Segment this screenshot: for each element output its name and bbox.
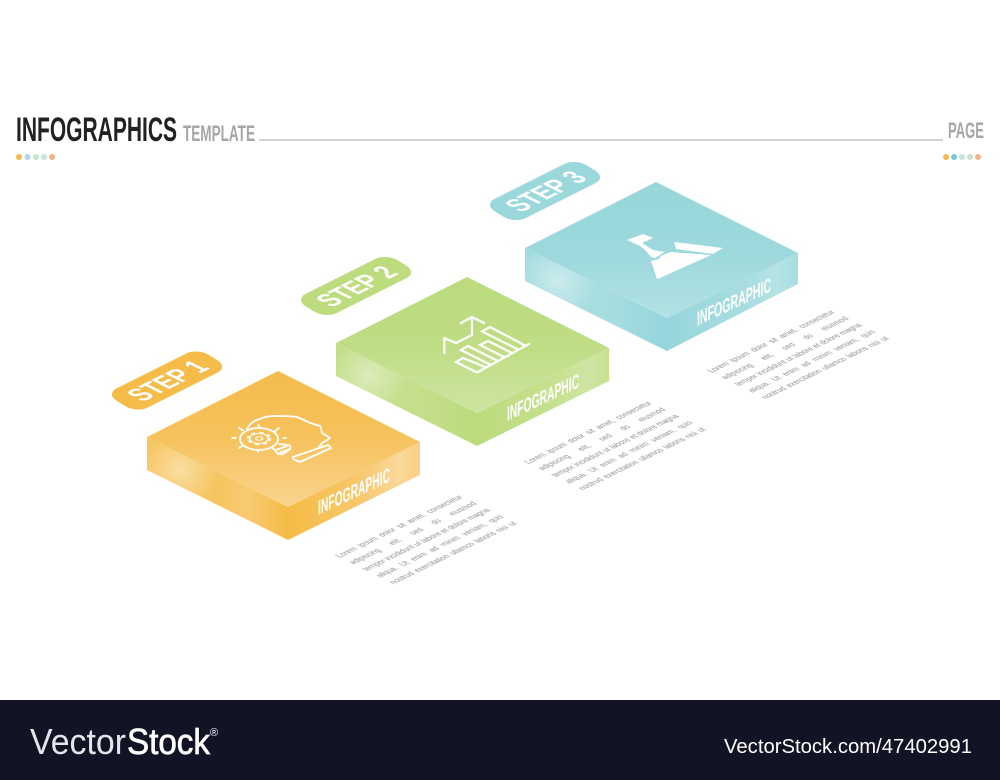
step 1 panel [106, 348, 520, 585]
footer id: VectorStock.com/47402991 [724, 736, 972, 758]
step 1 block [147, 371, 420, 540]
title: INFOGRAPHICS [16, 111, 177, 149]
step 3 label pill: STEP 3 [498, 168, 595, 216]
icon: growth bar chart [444, 317, 529, 372]
subtitle: TEMPLATE [183, 121, 255, 146]
side label: INFOGRAPHIC [318, 464, 390, 520]
step 1 description: Lorem ipsum dolor sit amet, consectetur [333, 494, 466, 559]
step 2 description: tempor incididunt ut labore et dolore magna [549, 413, 682, 478]
step 3 description [705, 309, 892, 400]
step 3 block [525, 182, 798, 351]
step 2 label pill: STEP 2 [309, 263, 406, 311]
icon: head with lightbulb [232, 416, 331, 462]
icon: mountain with flag [627, 234, 723, 279]
registered mark: ® [210, 727, 218, 739]
step 2 description [522, 400, 709, 491]
step 3 description: nostrud exercitation ullamco laboris nisi ut [759, 335, 892, 400]
step 1 description: tempor incididunt ut labore et dolore magna [360, 507, 493, 572]
step 2 panel [294, 253, 709, 491]
step 1 description: aliqua. Ut enim ad minim veniam, quis [374, 514, 506, 579]
step 2 description: aliqua. Ut enim ad minim veniam, quis [563, 420, 695, 485]
step 2 description: nostrud exercitation ullamco laboris nisi ut [576, 426, 709, 491]
step 3 panel [484, 158, 892, 400]
step 1 description: adipiscing elit, sed do eiusmod [347, 501, 479, 566]
step 3 description: tempor incididunt ut labore et dolore magna [732, 322, 865, 387]
footer logo: Stock [127, 721, 211, 762]
step 3 description: adipiscing elit, sed do eiusmod [719, 316, 851, 381]
step 2 description: Lorem ipsum dolor sit amet, consectetur [522, 400, 655, 465]
left dots [16, 154, 55, 160]
step 1 description: nostrud exercitation ullamco laboris nisi ut [387, 520, 520, 585]
footer bar [0, 700, 1000, 780]
step 3 description: Lorem ipsum dolor sit amet, consectetur [705, 309, 838, 374]
footer logo [30, 721, 211, 762]
right dots [943, 154, 981, 160]
header rule [259, 139, 943, 141]
step 1 label pill: STEP 1 [120, 357, 217, 405]
step 2 block [336, 277, 609, 446]
side label: INFOGRAPHIC [697, 274, 771, 331]
header [16, 111, 984, 160]
step 1 description [333, 494, 520, 585]
side label: INFOGRAPHIC [507, 370, 579, 426]
footer logo: Vector [30, 721, 126, 762]
step 3 description: aliqua. Ut enim ad minim veniam, quis [746, 329, 878, 394]
step 2 description: adipiscing elit, sed do eiusmod [536, 407, 668, 472]
